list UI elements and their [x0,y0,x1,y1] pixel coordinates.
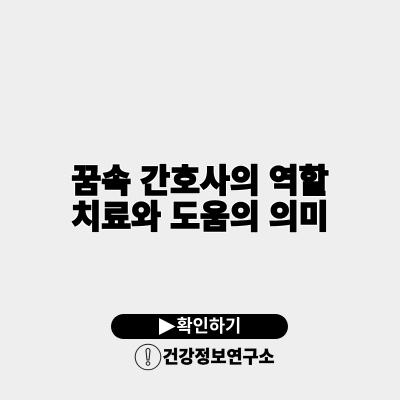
title: 치료와 도움의 의미 [71,199,329,235]
icon: play triangle [159,318,176,335]
button label: 확인하기 [176,316,241,336]
title: 꿈속 간호사의 역할 [71,163,329,199]
icon: exclamation circle [134,344,162,370]
title [70,162,330,235]
source label: 건강정보연구소 [162,347,274,367]
button: 확인하기 [111,314,288,339]
